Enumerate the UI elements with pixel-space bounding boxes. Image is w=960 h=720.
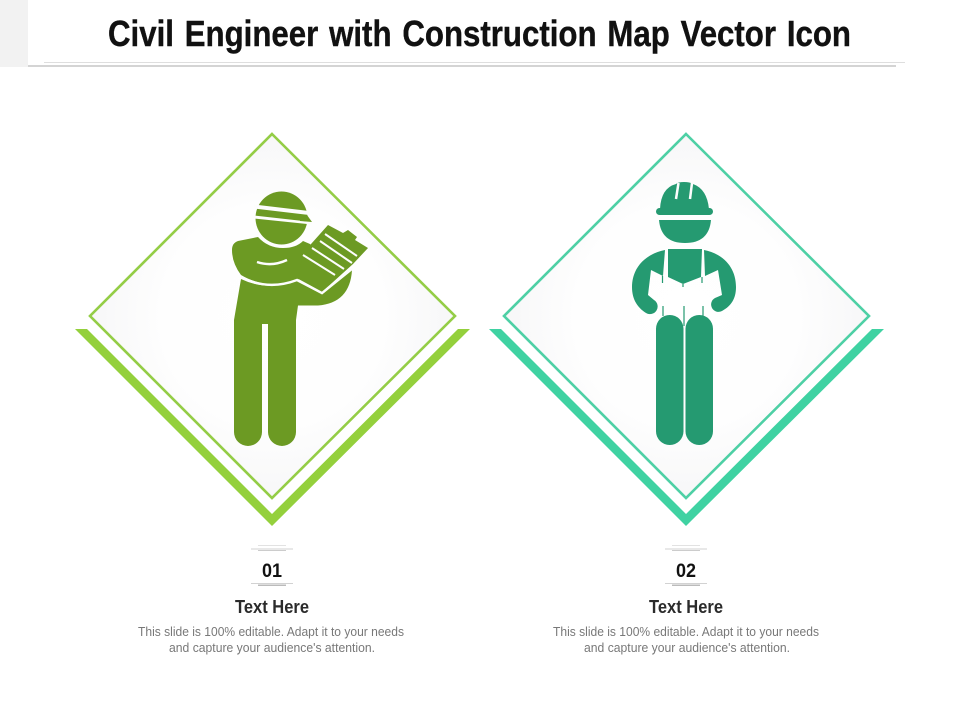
ornament top	[251, 545, 293, 551]
heading: Text Here	[235, 597, 309, 617]
icon: worker reading map	[632, 182, 736, 445]
ornament bottom	[665, 583, 707, 586]
hard hat	[656, 182, 713, 215]
body and legs	[234, 270, 352, 446]
face	[659, 220, 711, 243]
clipboard	[298, 225, 368, 293]
description: This slide is 100% editable. Adapt it to your needs	[553, 624, 819, 639]
description: This slide is 100% editable. Adapt it to your needs	[138, 624, 404, 639]
arm gap lines	[241, 260, 353, 293]
caption: item 01	[138, 545, 404, 655]
upper arm	[232, 237, 335, 293]
chevron green	[75, 329, 470, 526]
ornament bottom	[251, 583, 293, 586]
panel: item 01 diamond	[75, 134, 470, 526]
head with helmet band	[254, 192, 312, 244]
description	[138, 624, 404, 655]
description	[553, 624, 819, 655]
number 02: 02	[676, 561, 696, 582]
panel: item 02 diamond	[489, 134, 884, 526]
left arm	[632, 250, 665, 314]
caption: item 02	[553, 545, 819, 655]
ornament top	[665, 545, 707, 551]
chevron teal	[489, 329, 884, 526]
diamond outline green	[90, 134, 455, 498]
description: and capture your audience's attention.	[584, 640, 790, 655]
torso	[668, 249, 702, 284]
map fold lines	[662, 276, 703, 326]
diamond outline teal	[504, 134, 869, 498]
description: and capture your audience's attention.	[169, 640, 375, 655]
number 01: 01	[262, 561, 282, 582]
right arm	[704, 250, 736, 312]
icon: engineer holding clipboard	[232, 192, 368, 446]
header: corner block and rules	[0, 0, 905, 67]
legs	[656, 315, 713, 445]
heading: Text Here	[649, 597, 723, 617]
title: Civil Engineer with Construction Map Vector Icon	[108, 13, 851, 54]
